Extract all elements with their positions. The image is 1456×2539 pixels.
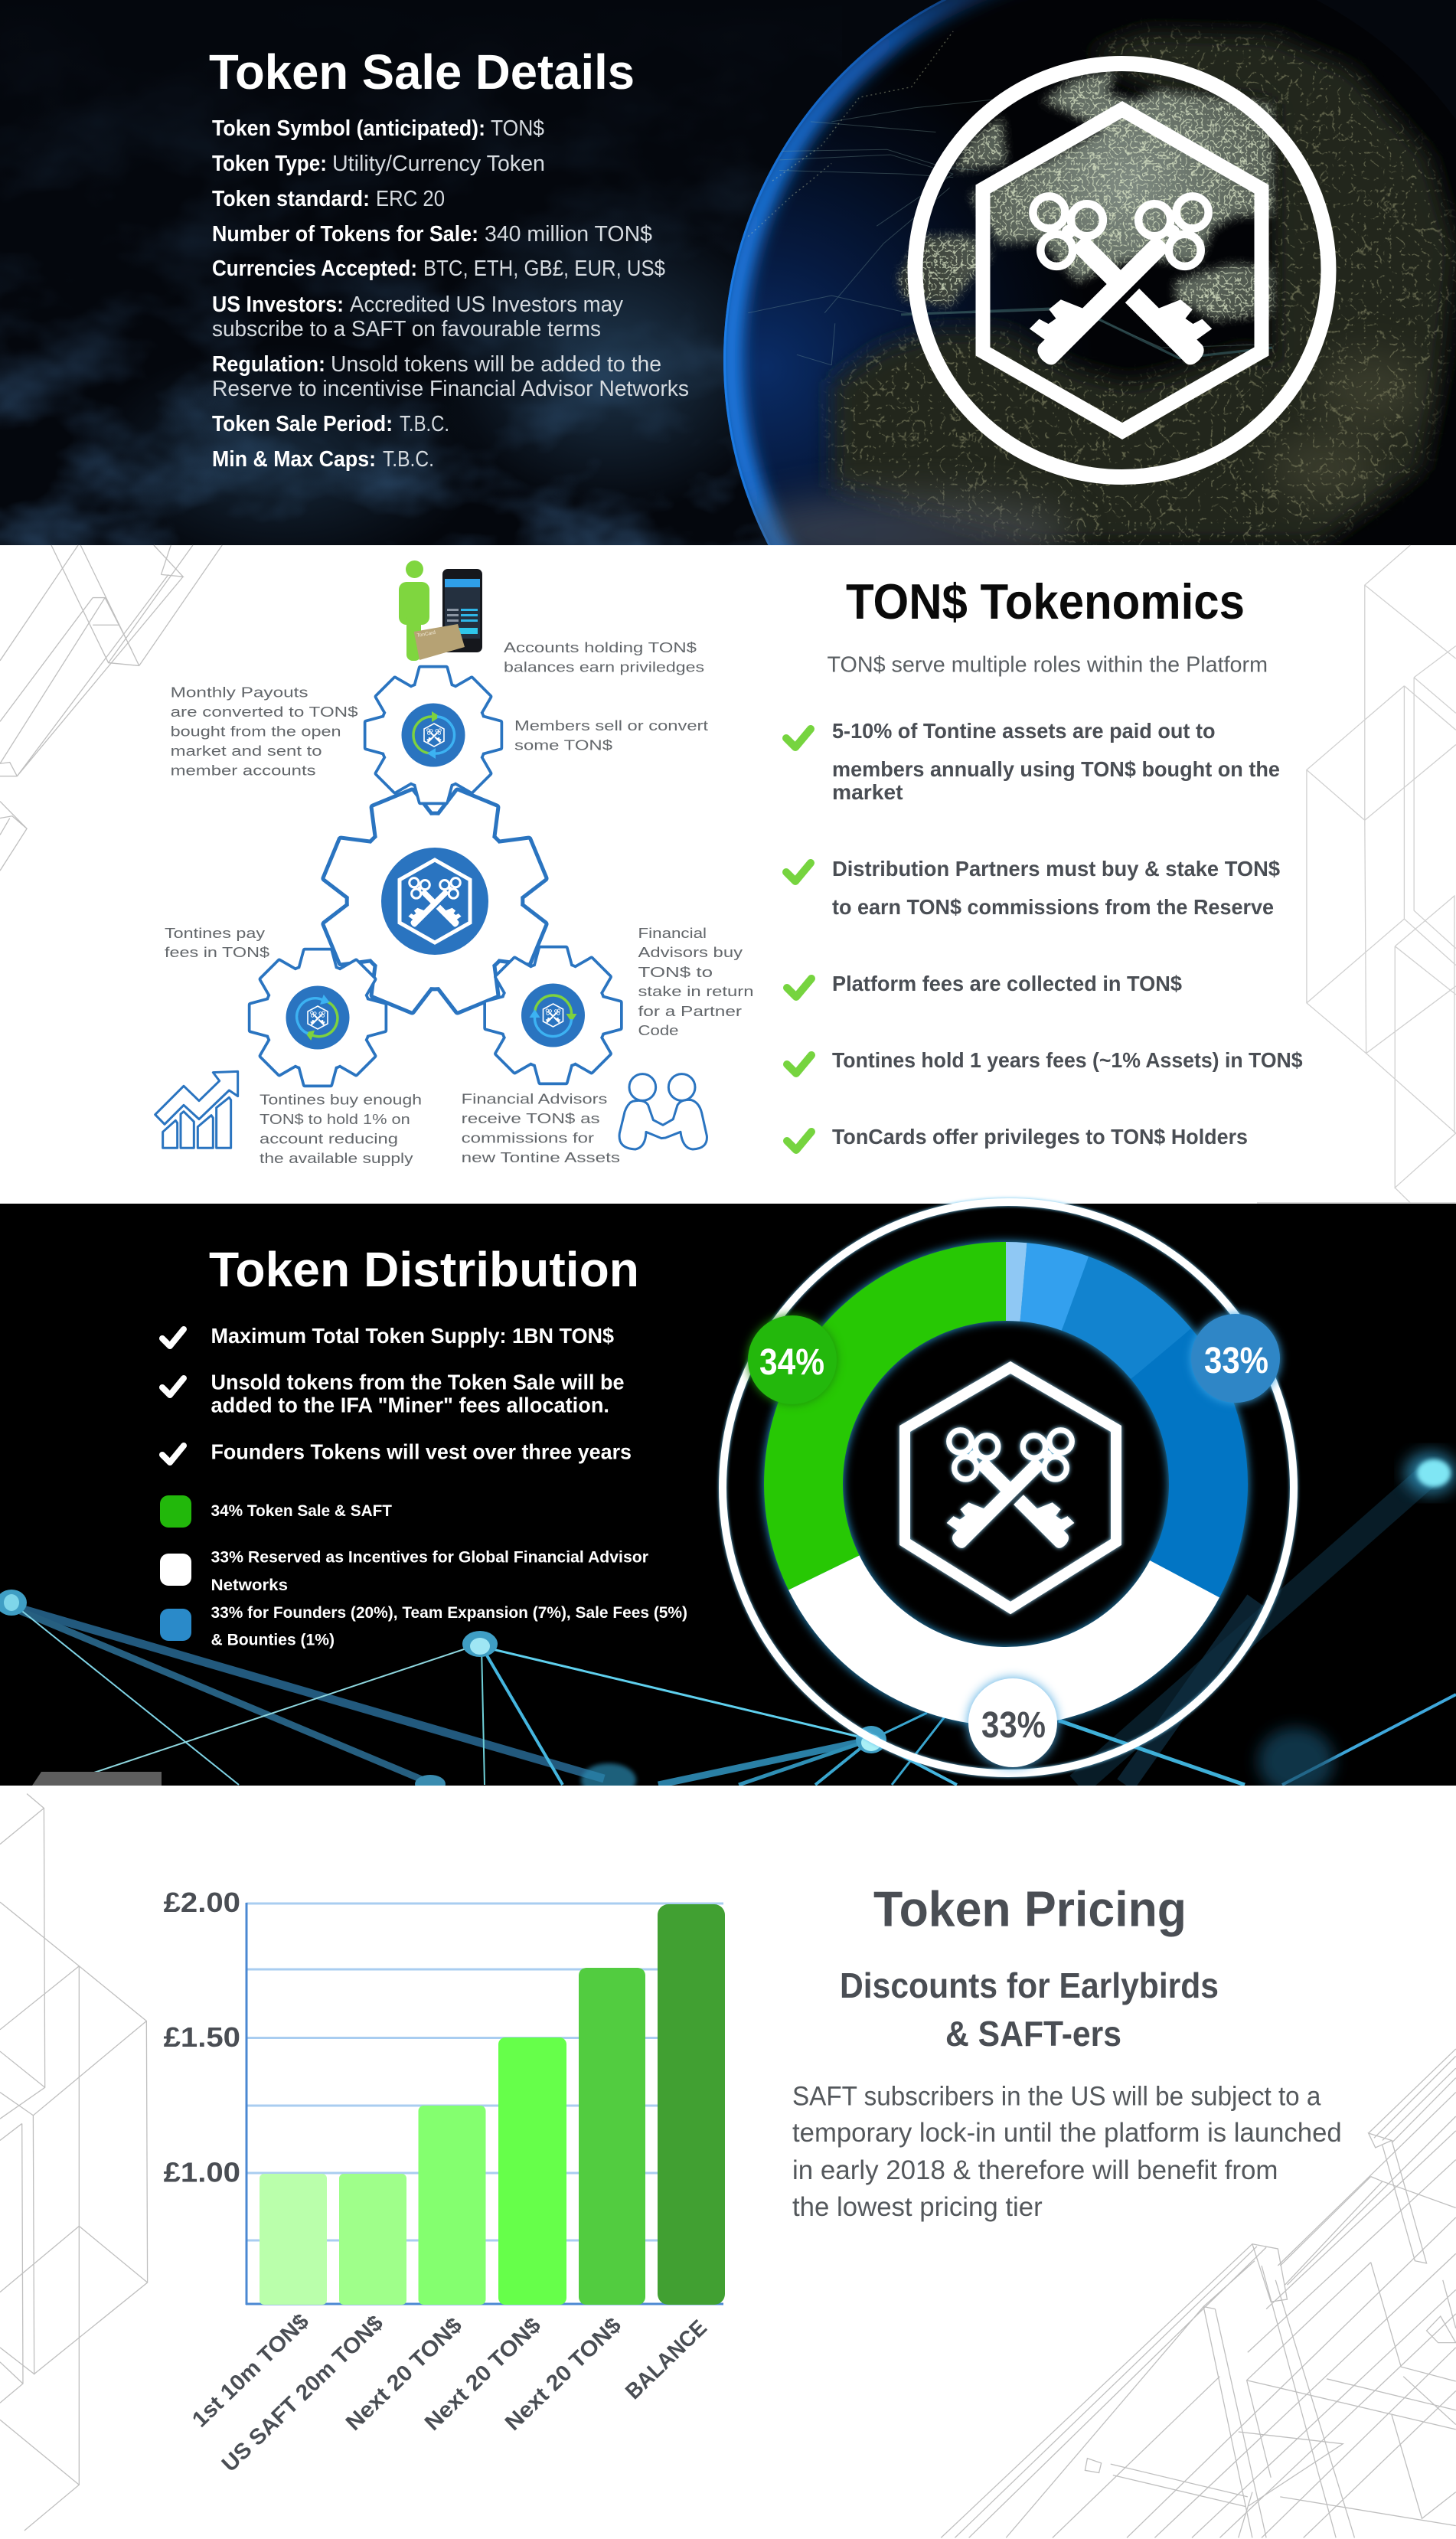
x axis labels: 1st 10m TON$ xyxy=(188,2309,314,2433)
token detail list: Number of Tokens for Sale: xyxy=(212,222,478,247)
caption: tontines buy: the available supply xyxy=(260,1150,413,1166)
panel: token sale details xyxy=(0,0,1456,545)
token detail list: BTC, ETH, GB£, EUR, US$ xyxy=(423,257,665,281)
caption: tontines buy: Tontines buy enough xyxy=(260,1092,422,1108)
caption: financial advisors buy: TON$ to xyxy=(638,964,713,980)
caption: financial advisors buy: stake in return xyxy=(638,983,753,999)
note 2 xyxy=(211,1371,625,1417)
caption: tontines pay: Tontines pay xyxy=(165,925,266,941)
caption: members sell: some TON$ xyxy=(514,737,612,753)
x axis labels: Next 20 TON$ xyxy=(420,2313,546,2436)
top gear xyxy=(366,668,501,802)
token detail list: ERC 20 xyxy=(376,187,445,211)
globe with city lights xyxy=(723,0,1456,545)
token detail list: Token standard: xyxy=(212,187,370,211)
legend text founders: 33% for Founders (20%), Team Expansion (7%), Sale Fees (5%) xyxy=(211,1604,687,1622)
badge: 34 percent: 34% xyxy=(759,1342,824,1383)
legend text incentives xyxy=(211,1548,648,1594)
bar US SAFT xyxy=(339,2174,406,2305)
badge: 33 percent blue: 33% xyxy=(1204,1341,1268,1381)
icon: hexagon keys logo xyxy=(905,1368,1116,1608)
note 3: Founders Tokens will vest over three years xyxy=(211,1439,632,1464)
item 1: market xyxy=(832,780,903,804)
x axis labels: Next 20 TON$ xyxy=(341,2313,467,2436)
token detail list: US Investors: xyxy=(212,292,344,317)
caption: tontines pay xyxy=(165,925,269,960)
item 5: TonCards offer privileges to TON$ Holders xyxy=(832,1125,1248,1149)
legend text token sale: 34% Token Sale & SAFT xyxy=(211,1502,392,1520)
item 2: Distribution Partners must buy & stake TON$ xyxy=(832,857,1280,881)
item 2: to earn TON$ commissions from the Reserve xyxy=(832,895,1274,919)
x axis labels xyxy=(188,2309,712,2477)
y axis labels: £1.00 xyxy=(164,2156,240,2188)
token detail list: Token Sale Period: xyxy=(212,412,393,436)
icon: member with phone and toncard: TonCard xyxy=(416,630,436,639)
token detail list: subscribe to a SAFT on favourable terms xyxy=(212,317,601,341)
token detail list: Currencies Accepted: xyxy=(212,257,417,281)
paragraph: SAFT subscribers: in early 2018 & therefore will benefit from xyxy=(792,2155,1278,2185)
panel: token distribution xyxy=(0,1202,1456,1797)
check icon xyxy=(162,1446,184,1462)
item 3: Platform fees are collected in TON$ xyxy=(832,972,1182,995)
token detail list: Reserve to incentivise Financial Advisor Networks xyxy=(212,377,689,401)
caption: tontines buy xyxy=(260,1092,422,1166)
heading: tokenomics: TON$ Tokenomics xyxy=(846,573,1245,629)
bottom right gear xyxy=(486,948,620,1083)
checklist: token roles xyxy=(786,719,1303,1150)
heading: token pricing: Token Pricing xyxy=(873,1881,1187,1937)
legend swatch green xyxy=(160,1495,191,1528)
paragraph: SAFT subscribers: the lowest pricing tier xyxy=(792,2192,1043,2222)
y axis labels: £2.00 xyxy=(164,1887,240,1918)
icon: growth chart xyxy=(155,1071,238,1148)
check icon 4 xyxy=(787,1055,811,1073)
heading: token distribution: Token Distribution xyxy=(209,1242,639,1297)
subheading: TON$ serve multiple roles within the Platform xyxy=(827,653,1268,678)
subheading: discounts: & SAFT-ers xyxy=(945,2014,1121,2054)
caption: members sell: Members sell or convert xyxy=(514,717,708,734)
check icon 3 xyxy=(787,979,811,997)
subheading: discounts: Discounts for Earlybirds xyxy=(840,1966,1219,2005)
legend text founders: & Bounties (1%) xyxy=(211,1632,335,1649)
badge: 33 percent blue xyxy=(1191,1314,1280,1403)
caption: monthly payouts xyxy=(171,685,358,779)
gridlines xyxy=(246,1903,723,2240)
caption: financial advisors receive: Financial Advisors xyxy=(462,1091,607,1107)
y axis labels: £1.50 xyxy=(164,2021,240,2053)
x axis labels: BALANCE xyxy=(621,2315,712,2404)
title: Token Sale Details xyxy=(209,44,635,100)
caption: financial advisors buy: Advisors buy xyxy=(638,944,743,960)
legend xyxy=(160,1495,687,1649)
checklist: supply notes xyxy=(162,1324,632,1464)
bar next 20 b xyxy=(498,2037,566,2305)
y axis labels xyxy=(164,1887,240,2188)
legend text founders xyxy=(211,1604,687,1649)
axes xyxy=(246,1903,723,2305)
token detail list: Regulation: xyxy=(212,352,325,377)
caption: monthly payouts: Monthly Payouts xyxy=(171,685,309,701)
icon: member with phone and toncard xyxy=(399,560,482,661)
icon: ring hexagon crossed keys logo xyxy=(916,64,1329,477)
note 1: Maximum Total Token Supply: 1BN TON$ xyxy=(211,1324,614,1348)
note 2: added to the IFA "Miner" fees allocation. xyxy=(211,1394,609,1417)
x axis labels: US SAFT 20m TON$ xyxy=(217,2311,388,2477)
central gear xyxy=(291,757,579,1045)
caption: monthly payouts: member accounts xyxy=(171,763,316,779)
caption: monthly payouts: bought from the open xyxy=(171,724,341,740)
check icon 5 xyxy=(787,1132,811,1150)
token detail list: TON$ xyxy=(491,116,544,141)
caption: financial advisors receive: new Tontine Assets xyxy=(462,1149,620,1165)
donut chart xyxy=(723,1202,1294,1773)
token detail list: T.B.C. xyxy=(400,412,449,436)
caption: financial advisors buy: for a Partner xyxy=(638,1003,742,1019)
bar next 20 c xyxy=(579,1968,645,2305)
legend swatch blue xyxy=(160,1609,191,1641)
caption: tontines buy: account reducing xyxy=(260,1131,398,1147)
item 4: Tontines hold 1 years fees (~1% Assets) in TON$ xyxy=(832,1048,1303,1072)
note 2: Unsold tokens from the Token Sale will be xyxy=(211,1371,625,1394)
token detail list xyxy=(212,116,689,472)
legend text incentives: Networks xyxy=(211,1577,288,1594)
bar chart xyxy=(164,1887,725,2477)
item 2 xyxy=(832,857,1280,919)
badge: 34 percent xyxy=(748,1315,837,1404)
caption: financial advisors receive: commissions for xyxy=(462,1130,594,1146)
check icon 2 xyxy=(786,863,811,881)
caption: accounts holding: Accounts holding TON$ xyxy=(504,639,697,655)
caption: monthly payouts: market and sent to xyxy=(171,743,322,759)
badge: 33 percent white xyxy=(968,1678,1057,1767)
paragraph: SAFT subscribers: SAFT subscribers in the US will be subject to a xyxy=(792,2081,1321,2112)
caption: accounts holding: balances earn priviledges xyxy=(504,659,704,675)
caption: financial advisors buy: Code xyxy=(638,1022,678,1038)
panel: tokenomics xyxy=(0,545,1456,1204)
check icon 1 xyxy=(786,729,811,747)
token detail list: 340 million TON$ xyxy=(485,222,652,247)
badge: 33 percent white: 33% xyxy=(981,1705,1046,1746)
subheading: discounts xyxy=(840,1966,1219,2054)
caption: tontines pay: fees in TON$ xyxy=(165,944,269,960)
gear diagram xyxy=(251,668,620,1084)
panel: token pricing xyxy=(0,1786,1456,2539)
caption: financial advisors receive: receive TON$ as xyxy=(462,1110,600,1126)
paragraph: SAFT subscribers: temporary lock-in until the platform is launched xyxy=(792,2118,1342,2148)
token detail list: Token Type: xyxy=(212,152,327,176)
legend text incentives: 33% Reserved as Incentives for Global Financial Advisor xyxy=(211,1548,648,1567)
caption: financial advisors receive xyxy=(462,1091,620,1165)
caption: tontines buy: TON$ to hold 1% on xyxy=(260,1111,410,1127)
token detail list: Min & Max Caps: xyxy=(212,447,376,472)
token detail list: Token Symbol (anticipated): xyxy=(212,116,485,141)
item 1: members annually using TON$ bought on the xyxy=(832,757,1280,781)
check icon xyxy=(162,1378,184,1395)
paragraph: SAFT subscribers xyxy=(792,2081,1342,2222)
caption: financial advisors buy xyxy=(638,925,753,1038)
caption: members sell xyxy=(514,717,708,753)
caption: accounts holding xyxy=(504,639,704,675)
token detail list: Unsold tokens will be added to the xyxy=(331,352,661,377)
caption: financial advisors buy: Financial xyxy=(638,925,707,941)
bar next 20 a xyxy=(418,2106,485,2305)
bar balance xyxy=(658,1904,725,2305)
icon: handshake xyxy=(619,1074,707,1149)
x axis labels: Next 20 TON$ xyxy=(501,2313,626,2436)
item 1 xyxy=(832,719,1280,804)
token detail list: Utility/Currency Token xyxy=(332,152,545,176)
bar 1st 10m xyxy=(260,2174,327,2305)
check icon xyxy=(162,1329,184,1346)
token detail list: T.B.C. xyxy=(383,447,434,472)
legend swatch white xyxy=(160,1554,191,1586)
token detail list: Accredited US Investors may xyxy=(350,292,623,317)
bottom left gear xyxy=(251,951,384,1084)
item 1: 5-10% of Tontine assets are paid out to xyxy=(832,719,1216,743)
caption: monthly payouts: are converted to TON$ xyxy=(171,704,358,720)
